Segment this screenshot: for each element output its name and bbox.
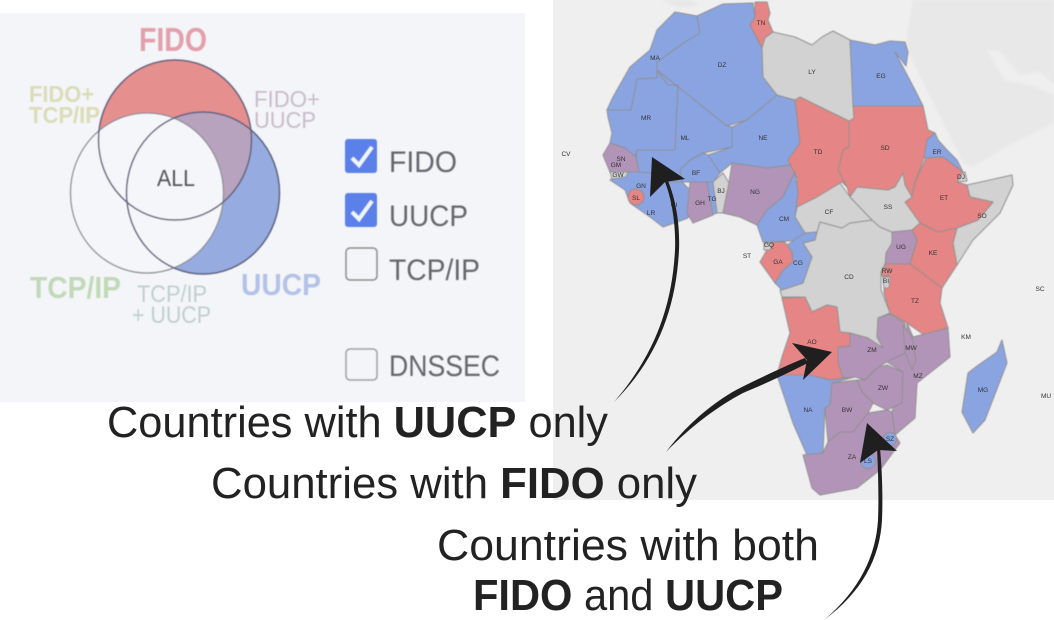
country codes: SS	[884, 204, 893, 211]
arrow: UUCP only	[614, 157, 685, 402]
country codes: ST	[743, 253, 751, 260]
country codes: LS	[864, 458, 873, 465]
country codes: ZM	[867, 347, 877, 354]
caption: both line 1: Countries with both	[437, 521, 819, 570]
country codes: TZ	[911, 298, 919, 305]
checkbox: UUCP: UUCP	[389, 200, 468, 233]
venn labels	[29, 21, 321, 329]
country codes: RW	[882, 268, 893, 275]
country codes: SL	[632, 195, 640, 202]
country codes: SN	[616, 156, 626, 163]
checkbox: FIDO	[345, 139, 457, 179]
country codes: NE	[758, 135, 768, 142]
venn labels: TCP/IP	[137, 281, 207, 308]
venn labels: FIDO+	[29, 81, 94, 107]
arrow: both FIDO and UUCP	[824, 423, 897, 620]
country codes: BW	[842, 407, 853, 414]
country codes: LY	[808, 69, 816, 76]
country codes: MU	[1041, 393, 1051, 400]
venn labels: FIDO	[139, 21, 207, 58]
country codes: TN	[757, 20, 766, 27]
country codes: MG	[978, 387, 988, 394]
venn labels: TCP/IP	[30, 270, 121, 305]
country codes: CD	[844, 274, 854, 281]
checkbox: TCP/IP: TCP/IP	[389, 254, 480, 287]
country codes: DJ	[957, 174, 965, 181]
country codes: GM	[611, 162, 621, 169]
country codes: MZ	[913, 373, 923, 380]
country codes: SD	[880, 145, 890, 152]
country codes: CG	[793, 260, 803, 267]
country codes: AO	[807, 339, 817, 346]
venn labels: ALL	[157, 165, 195, 191]
checkbox: DNSSEC: DNSSEC	[389, 350, 500, 383]
caption: both line 2: FIDO and UUCP	[473, 571, 783, 620]
country codes: TD	[814, 149, 823, 156]
country codes: MW	[905, 345, 918, 352]
country codes: CI	[671, 202, 677, 209]
venn labels: FIDO+	[254, 86, 320, 112]
country codes: DZ	[718, 62, 726, 69]
caption: UUCP only: Countries with UUCP only	[107, 398, 608, 447]
venn labels: UUCP	[241, 267, 321, 302]
country codes: ML	[680, 135, 690, 142]
checkbox: TCP/IP	[346, 248, 480, 287]
venn labels: TCP/IP	[29, 102, 100, 128]
country codes: NA	[803, 407, 813, 414]
countries	[603, 2, 1013, 495]
venn labels: + UUCP	[132, 302, 211, 329]
country codes: EG	[876, 73, 886, 80]
country codes: BJ	[717, 188, 725, 195]
panel: venn diagram selector	[0, 13, 525, 402]
country codes: KM	[961, 334, 971, 341]
checkbox: FIDO: FIDO	[389, 146, 457, 179]
country codes: GH	[695, 200, 705, 207]
country codes: UG	[896, 244, 906, 251]
country codes: CF	[825, 209, 833, 216]
country codes: ET	[940, 195, 948, 202]
country codes: TG	[707, 196, 717, 203]
country codes: CM	[779, 216, 789, 223]
country codes: SZ	[886, 436, 894, 443]
country codes	[561, 20, 1051, 465]
country codes: LR	[647, 210, 655, 217]
country codes: MR	[641, 115, 651, 122]
country codes: SO	[977, 213, 987, 220]
arrow: FIDO only	[666, 343, 832, 452]
country codes: GA	[773, 259, 783, 266]
country codes: BI	[883, 278, 889, 285]
country codes: GW	[612, 172, 624, 179]
country codes: MA	[650, 55, 661, 62]
venn diagram	[70, 60, 280, 274]
map of Africa	[553, 0, 1054, 500]
country codes: NG	[750, 189, 760, 196]
checkbox: DNSSEC	[346, 349, 500, 383]
caption: FIDO only: Countries with FIDO only	[211, 459, 697, 508]
country codes: ZA	[848, 454, 857, 461]
country codes: CV	[561, 151, 571, 158]
country codes: GQ	[764, 242, 774, 249]
country codes: BF	[692, 170, 700, 177]
country codes: ER	[932, 149, 942, 156]
country codes: ZW	[878, 385, 889, 392]
country codes: KE	[929, 250, 938, 257]
checkbox: UUCP	[345, 193, 468, 233]
venn labels: UUCP	[254, 107, 316, 133]
country codes: GN	[636, 183, 646, 190]
country codes: SC	[1035, 286, 1045, 293]
